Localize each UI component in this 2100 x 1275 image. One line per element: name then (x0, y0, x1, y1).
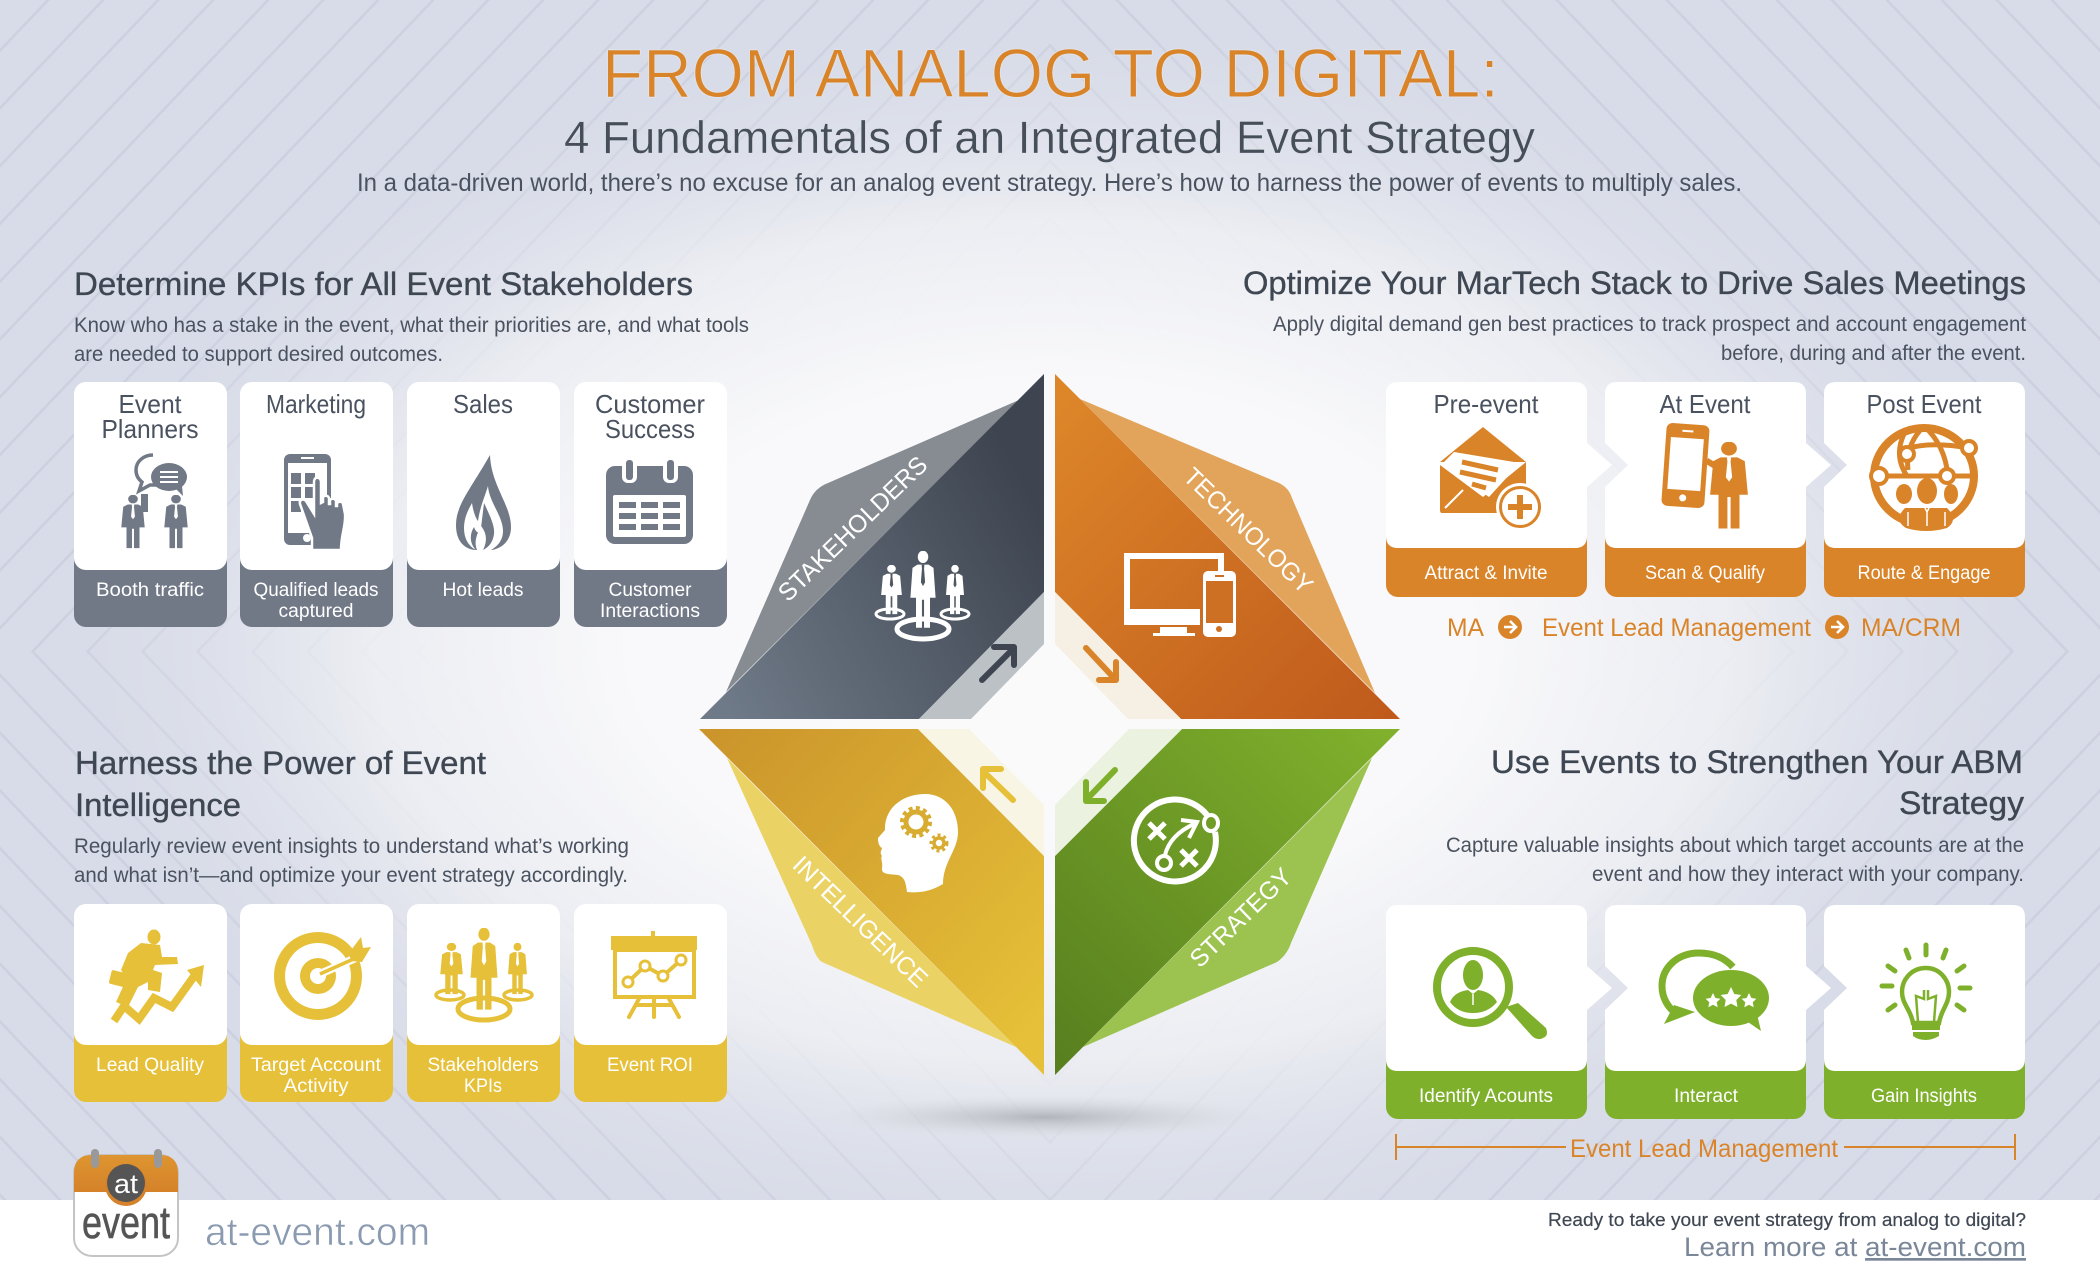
description: event and how they interact with your company. (1592, 863, 2024, 886)
panel: harness event intelligence (74, 745, 727, 1102)
card: customer success (574, 382, 727, 627)
logo: event (82, 1197, 170, 1248)
icon: light bulb (1882, 945, 1970, 1040)
footer (0, 1149, 2100, 1275)
website: at-event.com (205, 1211, 430, 1254)
description (1446, 834, 2024, 886)
card: identify accounts: Identify Acounts (1419, 1086, 1553, 1107)
card: identify accounts (1386, 905, 1612, 1119)
card: event planners (74, 382, 227, 627)
description (74, 835, 629, 887)
card: marketing: captured (278, 601, 354, 622)
quadrant: stakeholders (700, 374, 1044, 719)
panel: strengthen ABM (1386, 744, 2025, 1163)
quadrant: intelligence (699, 729, 1044, 1075)
heading: Strategy (1899, 785, 2024, 821)
heading: Determine KPIs for All Event Stakeholders (74, 266, 693, 302)
card: interact: Interact (1674, 1086, 1739, 1107)
subtitle: 4 Fundamentals of an Integrated Event Strategy (564, 112, 1535, 163)
panel: optimize martech (1243, 265, 2026, 642)
icon: calendar (606, 459, 693, 544)
card: marketing: Marketing (266, 389, 366, 419)
call to action: Ready to take your event strategy from analog to digital? (1548, 1210, 2026, 1230)
card: stakeholders KPIs: KPIs (464, 1076, 502, 1097)
label: TECHNOLOGY (1178, 463, 1318, 600)
card: marketing: Qualified leads (254, 580, 378, 601)
card: lead quality (74, 904, 227, 1102)
card: interact (1605, 905, 1831, 1119)
card: event planners: Planners (102, 414, 198, 444)
card: at event: Scan & Qualify (1645, 563, 1765, 584)
card: target account activity: Activity (284, 1076, 349, 1097)
bracket: event lead management: Event Lead Management (1570, 1135, 1838, 1163)
card: customer success: Success (605, 414, 695, 444)
card: stakeholders KPIs: Stakeholders (428, 1055, 538, 1076)
card: event ROI (574, 904, 727, 1102)
icon: phone and hand (284, 454, 345, 550)
card: customer success: Customer (595, 389, 705, 419)
heading (1491, 744, 2024, 821)
card: pre-event: Attract & Invite (1424, 563, 1548, 584)
description (1273, 313, 2026, 365)
arrow (1086, 648, 1116, 680)
icon: people talking (121, 455, 188, 548)
intro text: In a data-driven world, there’s no excuse for an analog event strategy. Here’s how to harness the power of events to multiply sales. (357, 169, 1742, 197)
logo: at (114, 1169, 139, 1199)
icon: playbook (1134, 799, 1218, 881)
card: at event: At Event (1660, 389, 1751, 419)
card: event planners: Event (118, 389, 182, 419)
card: post event: Route & Engage (1858, 563, 1990, 584)
description: before, during and after the event. (1721, 342, 2026, 365)
diagram shadow (821, 1095, 1271, 1139)
arrow (983, 769, 1013, 800)
heading: Harness the Power of Event (75, 745, 486, 781)
card: customer success: Customer (608, 580, 692, 601)
icon: magnifier (1437, 951, 1547, 1039)
card: event planners: Booth traffic (96, 580, 204, 601)
card: sales: Sales (453, 389, 513, 419)
description (74, 314, 749, 366)
flow: MA to CRM: MA (1447, 614, 1484, 642)
icon: speech bubbles (1662, 953, 1769, 1031)
heading: Use Events to Strengthen Your ABM (1491, 744, 2023, 780)
flow: MA to CRM: Event Lead Management (1542, 614, 1811, 642)
card: gain insights: Gain Insights (1871, 1086, 1977, 1107)
icon: running man (109, 930, 204, 1021)
icon: man with phone (1661, 423, 1748, 529)
icon: stakeholder group (876, 551, 969, 639)
card: post event (1824, 382, 2025, 597)
icon: head with gears (878, 794, 958, 892)
icon: globe and people (1871, 426, 1976, 531)
heading: Optimize Your MarTech Stack to Drive Sales Meetings (1243, 265, 2026, 301)
quadrant: technology (1055, 374, 1400, 719)
card: post event: Post Event (1866, 389, 1982, 419)
icon: monitor and phone (1124, 553, 1236, 637)
icon: invitation envelope (1440, 427, 1544, 531)
description: Capture valuable insights about which target accounts are at the (1446, 834, 2024, 857)
description: Apply digital demand gen best practices to track prospect and account engagement (1273, 313, 2026, 336)
description: and what isn’t—and optimize your event strategy accordingly. (74, 864, 628, 887)
description: Regularly review event insights to understand what’s working (74, 835, 629, 858)
arrow (1086, 770, 1115, 801)
icon: arrow circle (1498, 615, 1522, 639)
description: Know who has a stake in the event, what their priorities are, and what tools (74, 314, 749, 337)
flow: MA to CRM (1447, 614, 1961, 642)
panel: determine KPIs (74, 266, 749, 627)
card: marketing (240, 382, 393, 627)
heading (75, 745, 486, 823)
label: INTELLIGENCE (787, 851, 933, 993)
card: sales (407, 382, 560, 627)
quadrant: strategy (1055, 729, 1400, 1075)
card: pre-event (1386, 382, 1612, 597)
card: lead quality: Lead Quality (96, 1055, 204, 1076)
description: are needed to support desired outcomes. (74, 343, 443, 366)
icon: stakeholder group (436, 928, 532, 1020)
card: event ROI: Event ROI (607, 1055, 693, 1076)
card: target account activity (240, 904, 393, 1102)
bracket: event lead management (1396, 1134, 2015, 1163)
card: pre-event: Pre-event (1434, 389, 1539, 419)
card: sales: Hot leads (442, 580, 524, 601)
logo (74, 1149, 178, 1256)
icon: arrow circle (1825, 615, 1849, 639)
arrow (982, 647, 1014, 680)
card: stakeholders KPIs (407, 904, 560, 1102)
label: STRATEGY (1185, 863, 1298, 973)
card: customer success: Interactions (600, 601, 700, 622)
icon: presentation chart (611, 931, 697, 1017)
learn more link: Learn more at at-event.com (1684, 1232, 2026, 1262)
card: at event (1605, 382, 1831, 597)
heading: Intelligence (75, 787, 241, 823)
card: target account activity: Target Account (251, 1055, 382, 1076)
flow: MA to CRM: MA/CRM (1861, 614, 1961, 642)
icon: flame (456, 455, 511, 550)
card: gain insights (1824, 905, 2025, 1119)
title: FROM ANALOG TO DIGITAL: (602, 35, 1499, 112)
label: STAKEHOLDERS (773, 451, 933, 607)
icon: target (274, 932, 371, 1020)
